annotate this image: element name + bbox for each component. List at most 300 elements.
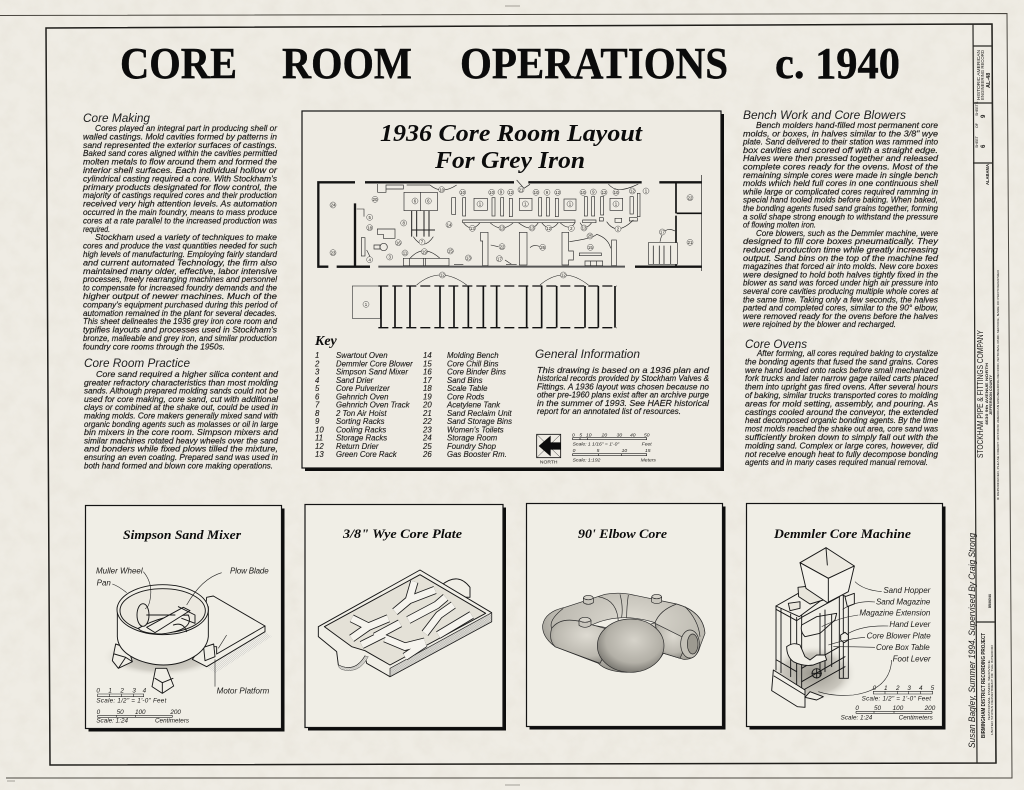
mixer scale bars: 50: [117, 709, 124, 716]
sheet number: SHEET: [975, 135, 979, 148]
text column: core making: majority of castings required cores and their production: [83, 191, 277, 200]
text column: bench work and core blowers: were rejoined by the blower and recharged.: [743, 320, 896, 329]
key: 3: [315, 368, 320, 376]
text column: core making: high levels of manufacturing. Employing fairly standard: [83, 250, 278, 259]
mixer scale bars: 4: [143, 688, 147, 695]
numbered callouts: 13: [470, 226, 475, 231]
plan scale bar: 0: [572, 432, 575, 438]
mixer scale bars: Scale: 1/2" = 1'-0" Feet: [96, 697, 167, 704]
key: Gehnrich Oven Track: [336, 400, 411, 410]
panel heading: 1936 Core Room Layout: [380, 121, 643, 147]
numbered callouts: 22: [500, 244, 505, 249]
plan scale bar: 15: [645, 448, 651, 454]
title: c. 1940: [775, 39, 900, 88]
plan scale bar: 10: [622, 448, 627, 454]
text column: core ovens: of baking, similar trucks transported cores to molding: [745, 391, 939, 400]
mixer scale bars: Centimeters: [155, 718, 190, 725]
text column: core ovens: [745, 339, 939, 467]
trim marks: [7, 6, 520, 785]
icon: north arrow: NORTH: [540, 460, 558, 466]
general information: This drawing is based on a 1936 plan and: [537, 366, 710, 375]
key: 13: [315, 450, 324, 459]
numbered callouts: 15: [448, 249, 453, 254]
key: 2: [314, 359, 320, 368]
text column: core making: walled castings. Mold cavities formed by patterns in: [83, 132, 277, 141]
plan scale bar: 5: [579, 432, 582, 438]
key: 10: [315, 425, 324, 434]
text column: bench work and core blowers: the bonding agents fused sand grains together, forming: [743, 204, 939, 213]
plan scale bar: 0: [573, 448, 576, 454]
mixer scale bars: 1: [108, 688, 112, 695]
key: Molding Bench: [447, 351, 499, 360]
panel heading: [380, 121, 643, 174]
key: Demmler Core Blower: [336, 359, 413, 368]
key: 24: [422, 434, 432, 442]
plan scale bar: 20: [601, 432, 607, 438]
text column: bench work and core blowers: a solid shape strong enough to withstand the pressure: [743, 212, 939, 221]
recording project: NATIONAL PARK SERVICE: [987, 660, 991, 720]
icon: core machine illustration: Core Blower Plate: [867, 632, 931, 641]
text column: bench work and core blowers: [742, 110, 939, 329]
key: Green Core Rack: [336, 450, 398, 459]
text column: core making: Stockham used a variety of techniques to make: [95, 233, 278, 242]
drawing credit: Susan Bagley, Summer 1994. Supervised By Craig Strong: [967, 533, 977, 748]
numbered callouts: 6: [414, 199, 417, 204]
numbered callouts: 6: [427, 199, 430, 204]
icon: sand mixer illustration: Motor Platform: [217, 686, 270, 695]
state label: ALABAMA: [985, 164, 991, 185]
oven racks: 12: [561, 273, 566, 278]
machine scale bars: 3: [907, 685, 911, 692]
machine scale bars: Scale: 1/2" = 1'-0" Feet: [862, 695, 931, 702]
text column: core room practice: used for core making, core sand, cut with additional: [84, 395, 278, 404]
text column: core making: Core Making: [83, 113, 151, 125]
key: Women's Toilets: [447, 425, 504, 434]
heading: 90' Elbow Core: [578, 527, 667, 541]
numbered callouts: 2: [570, 226, 573, 231]
general information: Fittings. A 1936 layout was chosen because no: [537, 382, 710, 391]
key: Scale Table: [447, 384, 488, 393]
key: Gas Booster Rm.: [447, 450, 507, 459]
text column: bench work and core blowers: remaining simple cores were made in single bench: [743, 171, 938, 180]
text column: core ovens: heat decomposed organic bonding agents. By the time: [745, 416, 939, 425]
machine scale bars: 0: [873, 685, 877, 692]
text column: core ovens: were hand loaded onto racks before small mechanized: [745, 366, 939, 375]
panel: simpson sand mixer: [86, 506, 284, 732]
text column: core room practice: Core Room Practice: [84, 358, 190, 370]
text column: bench work and core blowers: of flowing molten iron.: [743, 221, 816, 230]
recording project: BIRMINGHAM: [988, 594, 992, 608]
machine scale bars: 1: [884, 685, 888, 692]
text column: core making: Cores played an integral part in producing shell or: [95, 124, 277, 133]
numbered callouts: 10: [534, 190, 539, 195]
machine scale bars: [841, 685, 936, 722]
plan scale bar: Scale: 1:192: [573, 458, 601, 464]
numbered callouts: 1: [524, 202, 527, 207]
numbered callouts: 3: [388, 255, 391, 260]
numbered callouts: 12: [508, 190, 514, 195]
key: Core Chill Bins: [447, 359, 499, 368]
text column: core making: higher output of newer machines. Much of the: [83, 292, 278, 301]
text column: core making: foundry core rooms through the 1950s.: [83, 342, 225, 351]
general information: in the summer of 1993. See HAER historical: [537, 399, 709, 408]
key: Sand Drier: [336, 376, 374, 385]
text column: core ovens: fork trucks and later narrow gage railed carts placed: [745, 374, 939, 383]
key: 19: [423, 392, 432, 401]
general information: report for an annotated list of resources.: [537, 407, 681, 416]
mixer scale bars: 0: [96, 688, 100, 695]
numbered callouts: 12: [555, 190, 561, 195]
numbered callouts: 1: [569, 202, 572, 207]
text column: bench work and core blowers: were removed ready for the ovens before the halves: [743, 312, 938, 321]
text column: core making: [82, 113, 278, 351]
text column: core room practice: clays or combined at the shake out, could be used in: [84, 403, 278, 412]
numbered callouts: 10: [581, 190, 586, 195]
icon: core machine illustration: Hand Lever: [889, 620, 931, 629]
key: 14: [423, 351, 432, 360]
key: Simpson Sand Mixer: [336, 368, 408, 376]
icon: north arrow: [537, 434, 561, 466]
text column: core ovens: molding sand. Complex or large cores, however, did: [745, 441, 939, 450]
historic record label: HISTORIC AMERICAN: [976, 50, 981, 100]
icon: core machine illustration: [770, 548, 931, 707]
text column: core ovens: agents and in many cases required manual removal.: [745, 458, 928, 467]
plan scale bar: 10: [586, 432, 592, 438]
numbered callouts: 21: [519, 187, 524, 192]
icon: core machine illustration: Magazine Extension: [859, 609, 931, 618]
text column: core room practice: similar machines rotated heavy wheels over the sand: [84, 436, 279, 445]
key: Sand Storage Bins: [447, 417, 512, 426]
plan scale bar: 50: [644, 432, 650, 438]
numbered callouts: 18: [367, 225, 373, 230]
numbered callouts: 22: [688, 195, 693, 200]
text column: core making: processes, freely rearranging machines and personnel: [82, 275, 277, 284]
numbered callouts: 10: [439, 187, 445, 192]
plan scale bar: Scale: 1 1/16" = 1'-0": [573, 442, 619, 448]
numbered callouts: 11: [403, 251, 408, 256]
sheet number: OF: [975, 122, 979, 128]
key: 25: [422, 442, 432, 451]
machine scale bars: 200: [924, 705, 936, 712]
numbered callouts: 16: [396, 240, 401, 245]
text column: bench work and core blowers: magazines that forced air into molds. New core boxes: [743, 262, 938, 271]
machine scale bars: 0: [855, 705, 859, 712]
heading: Simpson Sand Mixer: [123, 528, 241, 542]
icon: sand mixer illustration: Plow Blade: [230, 566, 269, 575]
numbered callouts: 9: [500, 190, 503, 195]
numbered callouts: 4: [368, 257, 371, 262]
key: 15: [423, 359, 432, 368]
sheet number: [975, 101, 987, 148]
mixer scale bars: 0: [97, 709, 101, 716]
general information: General Information: [535, 349, 640, 361]
numbered callouts: 20: [373, 197, 378, 202]
text column: core ovens: most molds reached the shake out area, core sand was: [745, 425, 938, 434]
text column: core ovens: castings cooled around the conveyor, the extended: [745, 408, 939, 417]
text column: core making: Baked sand cores aligned within the cavities permitted: [83, 149, 278, 158]
text column: core ovens: areas for mold setting, assembly, and pouring. As: [745, 399, 938, 408]
text column: bench work and core blowers: were designed to hold both halves tightly fixed in the: [743, 270, 939, 279]
key: Key: [314, 334, 338, 349]
historic record label: [976, 50, 992, 100]
panel: elbow core: [526, 504, 726, 730]
key: Storage Room: [447, 434, 498, 442]
mixer scale bars: 100: [135, 709, 146, 716]
key: 21: [422, 409, 432, 418]
icon: core machine illustration: Core Box Table: [876, 643, 930, 652]
numbered callouts: 2: [617, 227, 620, 232]
numbered callouts: 14: [447, 222, 452, 227]
numbered callouts: 9: [592, 190, 595, 195]
general information: historical records provided by Stockham Valves &: [537, 374, 709, 383]
text column: core room practice: [84, 358, 279, 470]
floor plan: [318, 175, 702, 328]
key: Core Pulverizer: [336, 384, 390, 393]
key: Core Rods: [447, 392, 484, 401]
text column: core making: typifies layouts and processes used in Stockham's: [83, 326, 277, 335]
text column: core room practice: greater refractory characteristics than most molding: [84, 378, 279, 387]
text column: core ovens: the bonding agents that fused the sand grains. Cores: [745, 357, 938, 366]
text column: core room practice: both hand formed and blown core making operations.: [84, 461, 273, 470]
recording project: BIRMINGHAM DISTRICT RECORDING PROJECT: [981, 633, 987, 738]
text column: bench work and core blowers: molds which held full cores in one continuous shell: [743, 179, 938, 188]
mixer scale bars: Scale: 1:24: [96, 718, 128, 725]
key: Sorting Racks: [336, 417, 385, 426]
text column: core making: cores at a rate parallel to the increased production was: [83, 216, 277, 225]
text column: core ovens: them into upright gas fired ovens. After several hours: [745, 383, 938, 392]
company name: [975, 330, 993, 458]
machine scale bars: Scale: 1:24: [841, 715, 873, 722]
key: 5: [315, 384, 320, 393]
numbered callouts: 13: [466, 256, 471, 261]
key: 17: [423, 376, 432, 385]
text column: bench work and core blowers: blower as sand was forced under high air pressure into: [743, 279, 939, 288]
key: [314, 334, 512, 459]
key: 8: [315, 409, 320, 418]
panel: 1936 core room layout: [302, 111, 724, 471]
text column: core making: automation remained in the plant for several decades.: [83, 309, 277, 318]
historic record label: ENGINEERING RECORD: [980, 50, 985, 100]
heading: Demmler Core Machine: [773, 526, 911, 541]
text column: core making: This sheet delineates the 1936 grey iron core room and: [83, 317, 278, 326]
text column: bench work and core blowers: complete cores ready for the ovens. Most of the: [743, 162, 939, 172]
key: 23: [422, 425, 432, 434]
numbered callouts: 8: [402, 221, 405, 226]
mixer scale bars: 3: [132, 688, 136, 695]
text column: core room practice: making molds. Core makers generally mixed sand with: [84, 412, 278, 420]
numbered callouts: 12: [602, 190, 607, 195]
numbered callouts: 15: [588, 245, 593, 250]
text column: bench work and core blowers: while large or complicated cores required ramming in: [743, 187, 938, 196]
machine scale bars: 4: [919, 685, 923, 692]
icon: core machine illustration: Sand Hopper: [883, 586, 931, 595]
title: CORE: [120, 39, 237, 88]
key: 18: [423, 384, 432, 393]
icon: sand mixer illustration: Pan: [97, 578, 111, 587]
plan scale bar: 30: [617, 432, 622, 438]
text column: core making: received very high attention levels. As automation: [83, 200, 277, 209]
text column: core making: to compensate for increased foundry demands and the: [83, 284, 278, 293]
key: Core Binder Bins: [447, 368, 506, 376]
numbered callouts: 1: [479, 202, 482, 207]
panel frame: [746, 504, 946, 730]
key: 22: [422, 417, 432, 426]
text column: bench work and core blowers: plate. Sand delivered to their station was rammed into: [742, 138, 939, 147]
key: Storage Racks: [336, 434, 387, 442]
plan scale bar: Feet: [642, 442, 652, 448]
text column: core making: sand represented the exterior surfaces of castings.: [83, 141, 277, 150]
key: Acetylene Tank: [446, 400, 501, 410]
company name: 4630 9th AVENUE NORTH: [985, 363, 989, 425]
sheet number: SHEETS: [975, 101, 979, 116]
panel frame: [302, 111, 724, 471]
numbered callouts: 25: [588, 234, 593, 239]
numbered callouts: 17: [497, 256, 502, 261]
numbered callouts: 12: [546, 226, 552, 231]
text column: core ovens: After forming, all cores required baking to crystalize: [756, 349, 939, 358]
text column: bench work and core blowers: reduced production time while greatly increasing: [743, 246, 939, 254]
key: 7: [315, 400, 320, 410]
text column: core making: bronze, malleable and grey iron, and similar production: [83, 334, 277, 343]
key: Gehnrich Oven: [336, 392, 388, 401]
key: Swartout Oven: [336, 351, 388, 360]
numbered callouts: 17: [660, 230, 665, 235]
numbered callouts: 13: [582, 226, 587, 231]
icon: sand mixer illustration: Muller Wheel: [96, 566, 143, 575]
text column: core room practice: bin mixers in the core room. Simpson mixers and: [84, 428, 279, 437]
numbered callouts: 9: [546, 190, 549, 195]
title: [120, 39, 900, 88]
heading: 3/8" Wye Core Plate: [342, 527, 463, 541]
historic record label: AL-48: [986, 73, 992, 88]
numbered callouts: 1: [645, 189, 648, 194]
machine scale bars: 50: [874, 705, 882, 712]
text column: bench work and core blowers: Halves were then pressed together and released: [743, 154, 939, 163]
oven racks: [352, 272, 617, 328]
text column: bench work and core blowers: output. Sand bins on the top of the machine fed: [743, 254, 939, 263]
machine scale bars: 5: [931, 685, 935, 692]
numbered callouts: 10: [489, 190, 495, 195]
icon: core machine illustration: Foot Lever: [893, 654, 931, 663]
panel: demmler core machine: [746, 504, 946, 730]
text column: bench work and core blowers: box cavities and scored off with a straight edge.: [743, 146, 938, 155]
plan scale bar: [572, 432, 656, 464]
text column: bench work and core blowers: molds, or boxes, in halves similar to the 3/8" wye: [743, 129, 939, 138]
text column: bench work and core blowers: Bench Work and Core Blowers: [743, 110, 906, 122]
title: OPERATIONS: [460, 39, 728, 88]
oven racks: 12: [440, 273, 445, 278]
text column: bench work and core blowers: several core cavities producing multiple whole cores at: [743, 287, 939, 296]
text column: core making: and current automated Technology, the firm also: [83, 258, 278, 267]
numbered callouts: 24: [331, 203, 336, 208]
key: 2 Ton Air Hoist: [335, 409, 387, 418]
key: 9: [315, 417, 320, 426]
key: 4: [315, 376, 320, 385]
machine scale bars: Centimeters: [899, 715, 934, 722]
key: Return Drier: [336, 442, 379, 451]
text column: core ovens: Core Ovens: [745, 339, 807, 351]
recording project: UNITED STATES DEPARTMENT OF THE INTERIOR: [990, 645, 994, 735]
company name: JEFFERSON COUNTY: [989, 375, 993, 415]
numbered callouts: 13: [530, 226, 535, 231]
sheet number: 6: [981, 144, 987, 148]
numbered callouts: [330, 187, 693, 263]
text column: core ovens: sufficiently broken down to simply fall out with the: [745, 433, 939, 442]
panel frame: [86, 506, 284, 732]
text column: bench work and core blowers: Core blowers, such as the Demmler machine, were: [756, 229, 939, 238]
text column: core making: maintained many older, effective, labor intensive: [83, 267, 278, 276]
text column: bench work and core blowers: parted and completed cores, similar to the 90° elbow,: [742, 304, 938, 313]
numbered callouts: 21: [688, 240, 693, 245]
numbered callouts: 26: [540, 245, 546, 250]
key: Sand Reclaim Unit: [447, 409, 512, 418]
plan scale bar: 5: [597, 448, 600, 454]
icon: core plate illustration: [318, 570, 492, 677]
numbered callouts: 10: [614, 190, 619, 195]
panel: wye core plate: [305, 504, 506, 730]
key: 12: [315, 442, 324, 451]
key: Foundry Shop: [447, 442, 497, 451]
numbered callouts: 23: [331, 250, 336, 255]
general information: other pre-1960 plans exist after an archive purge: [537, 391, 710, 400]
text column: core making: cores and produce the vast quantities needed for such: [83, 242, 277, 251]
key: Cooling Racks: [336, 425, 386, 434]
icon: core machine illustration: Sand Magazine: [876, 597, 931, 606]
text column: bench work and core blowers: Bench molders hand-filled most permanent core: [756, 121, 939, 130]
numbered callouts: 13: [500, 226, 505, 231]
text column: bench work and core blowers: the same time. Taking only a few seconds, the halves: [743, 295, 938, 304]
numbered callouts: 19: [422, 249, 427, 254]
key: 11: [315, 434, 323, 442]
numbered callouts: 10: [460, 190, 466, 195]
margin note: IF REPRODUCED, PLEASE CREDIT: HISTORIC AMERICAN ENGINEERING RECORD, NATIONAL PARK SERVICE, NAME OF PHOTOGRAPHER: [996, 270, 1000, 500]
machine scale bars: 2: [895, 685, 900, 692]
numbered callouts: 1: [615, 202, 618, 207]
oven racks: 1: [365, 302, 368, 307]
mixer scale bars: [96, 688, 190, 725]
numbered callouts: 7: [421, 240, 424, 245]
panel frame: [305, 504, 506, 730]
key: 1: [315, 351, 319, 360]
numbered callouts: 12: [630, 189, 635, 194]
plan scale bar: Meters: [641, 458, 656, 464]
key: 6: [315, 392, 320, 401]
icon: elbow core illustration: [543, 593, 705, 672]
text column: core making: occurred in the main foundry, means to mass produce: [83, 208, 278, 217]
title block: [967, 24, 1000, 763]
text column: core making: molten metals to flow around them and formed the: [83, 158, 278, 167]
text column: bench work and core blowers: special hand tooled molds before baking. When baked,: [743, 196, 938, 205]
text column: core making: company's equipment purchased during this period of: [83, 300, 278, 309]
icon: sand mixer illustration: [96, 566, 272, 695]
text column: core making: primary products designated for flow control, the: [82, 183, 278, 192]
text column: core making: required.: [83, 225, 110, 234]
text column: core room practice: organic bonding agents such as molasses or oil in large: [84, 420, 279, 429]
text column: bench work and core blowers: designed to fill core boxes pneumatically. They: [743, 237, 939, 246]
text column: core room practice: sands. Although prepared molding sands could not be: [84, 387, 279, 396]
key: 20: [422, 400, 432, 410]
text column: core room practice: and bonders while fixed plows tilled the mixture,: [84, 445, 278, 454]
title: ROOM: [282, 39, 412, 88]
key: Sand Bins: [447, 376, 483, 385]
general information: [535, 349, 710, 416]
sheet number: 9: [981, 114, 987, 118]
mixer scale bars: 200: [169, 709, 181, 716]
company name: STOCKHAM PIPE & FITTINGS COMPANY: [975, 330, 985, 458]
numbered callouts: 5: [368, 215, 371, 220]
text column: core room practice: Core sand required a higher silica content and: [96, 370, 279, 379]
text column: core ovens: not receive enough heat to fully decompose bonding: [745, 450, 939, 459]
